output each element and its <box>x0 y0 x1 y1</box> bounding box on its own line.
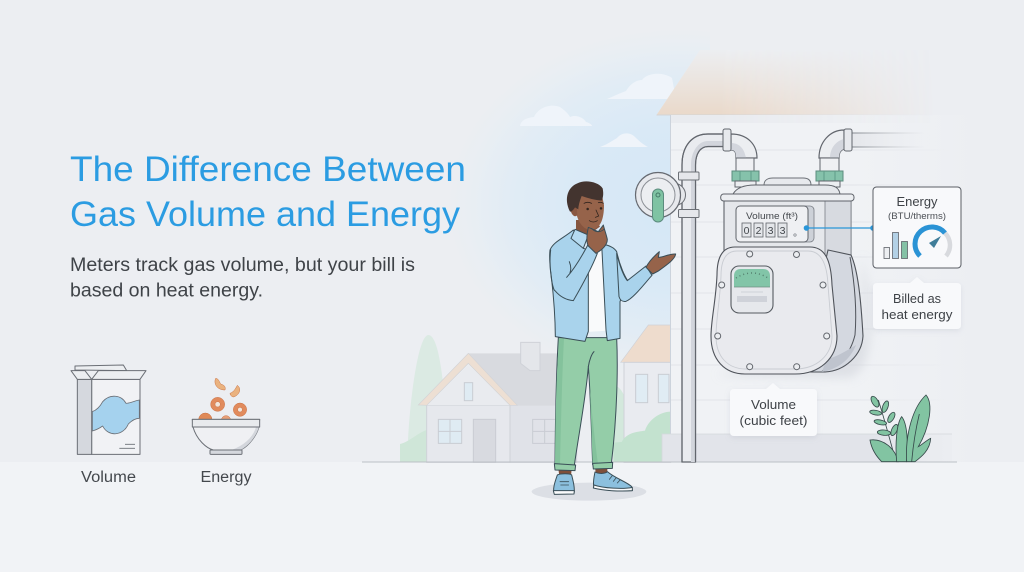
bowl <box>192 419 260 450</box>
left pipe <box>678 129 759 462</box>
ankles <box>558 467 607 477</box>
title: Gas Volume and Energy <box>70 195 461 234</box>
green shrub <box>613 412 671 462</box>
open hand <box>646 252 676 274</box>
plant <box>869 395 931 462</box>
top cap <box>764 178 811 185</box>
jacket right panel <box>602 244 627 341</box>
gauge <box>915 227 950 256</box>
cereal pieces <box>199 378 247 426</box>
trousers <box>555 338 617 465</box>
right pipe <box>816 129 932 187</box>
shut-off valve <box>636 172 686 222</box>
label: energy: Energy <box>200 469 252 486</box>
title <box>70 150 466 234</box>
icon: cereal box <box>71 365 146 454</box>
gas meter <box>711 178 871 378</box>
head <box>575 193 604 230</box>
title: The Difference Between <box>70 150 466 189</box>
digit counter: 2 <box>756 225 762 237</box>
trouser cuffs <box>554 462 613 471</box>
front cover <box>711 247 837 374</box>
clouds <box>520 74 676 147</box>
subtitle <box>70 255 415 302</box>
white shirt <box>587 245 608 332</box>
neighbor house <box>621 325 671 462</box>
billed as callout: Billed as <box>893 291 941 306</box>
digit counter <box>742 223 787 237</box>
connector line <box>804 225 876 231</box>
billed as callout <box>873 277 961 329</box>
label: volume: Volume <box>81 469 136 486</box>
near sleeve <box>550 244 597 301</box>
house with gable roof <box>418 342 577 462</box>
lid <box>733 185 840 194</box>
shoes <box>553 472 632 494</box>
sky <box>430 0 710 462</box>
hair <box>567 181 603 212</box>
ear <box>570 205 577 216</box>
roof <box>657 62 892 114</box>
ground line <box>362 461 957 463</box>
far bush <box>613 385 630 462</box>
volume callout: (cubic feet) <box>740 413 808 428</box>
ground shadow <box>532 483 646 501</box>
person <box>532 181 676 501</box>
tree <box>407 335 448 462</box>
hand at chin <box>587 225 607 253</box>
bush <box>400 430 437 462</box>
upper body <box>724 200 851 286</box>
dial window <box>731 266 773 313</box>
face <box>584 202 603 222</box>
digit counter: 3 <box>768 225 774 237</box>
digit counter: 0 <box>744 225 750 237</box>
screws <box>715 251 830 370</box>
back shell <box>800 250 863 372</box>
digit counter: 3 <box>780 225 786 237</box>
icon: cereal bowl <box>192 378 260 454</box>
energy card <box>873 187 961 268</box>
ground <box>0 462 1024 572</box>
volume reading label: Volume (ft³) <box>746 211 798 222</box>
main house <box>656 62 892 116</box>
background houses <box>400 325 671 462</box>
foundation <box>662 434 952 462</box>
wall <box>670 115 877 434</box>
collar <box>571 229 606 250</box>
neck <box>576 220 600 235</box>
subtitle: Meters track gas volume, but your bill is <box>70 255 415 276</box>
index plate <box>736 206 814 242</box>
billed as callout: heat energy <box>882 307 953 322</box>
bar chart <box>884 232 908 258</box>
subtitle: based on heat energy. <box>70 280 263 302</box>
wall shadow <box>716 255 871 378</box>
elbow <box>731 134 757 158</box>
energy unit: (BTU/therms) <box>888 211 946 221</box>
pipe brackets <box>678 172 699 180</box>
far sleeve <box>617 253 652 301</box>
jacket left panel <box>550 230 588 341</box>
volume callout: Volume <box>751 397 796 412</box>
energy heading: Energy <box>896 194 938 209</box>
volume callout <box>730 383 817 436</box>
